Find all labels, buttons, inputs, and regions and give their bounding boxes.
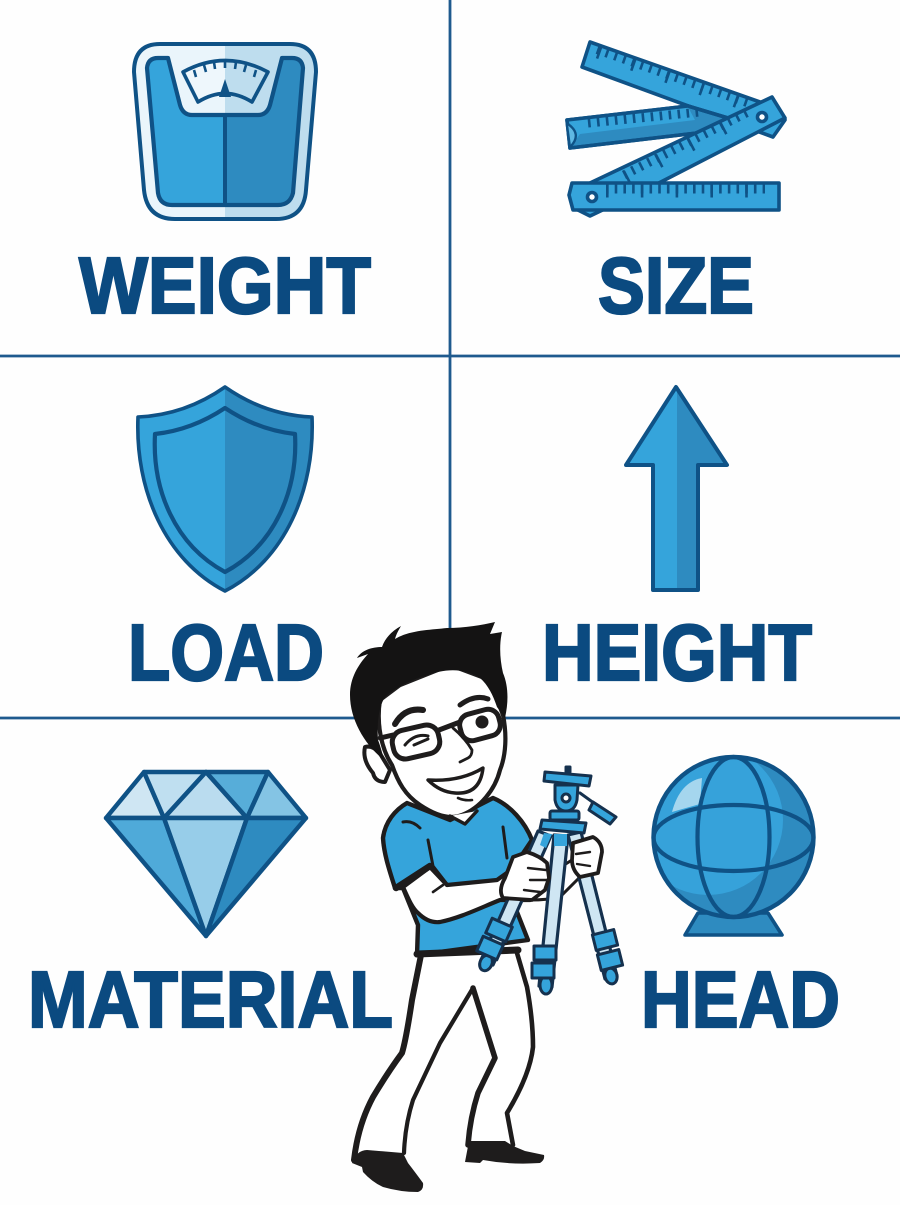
- man: left arm: [403, 860, 530, 922]
- man: shoes: [352, 1141, 544, 1192]
- icon: folding ruler: [567, 42, 785, 216]
- man: hand on left leg: [501, 852, 549, 900]
- character: man holding tripod: [350, 622, 623, 1192]
- label: load: LOAD: [128, 608, 324, 697]
- tripod: leg cuffs: [477, 918, 623, 994]
- man: elbow crease: [433, 885, 443, 892]
- icon: ball head globe: [651, 754, 816, 937]
- label: head: HEAD: [641, 955, 840, 1044]
- label: weight: WEIGHT: [79, 241, 371, 330]
- man: trousers: [352, 950, 533, 1163]
- man: sleeve hem: [396, 866, 430, 888]
- tripod: head and plate: [540, 767, 616, 848]
- man: face: [379, 665, 505, 824]
- tripod: legs: [481, 831, 617, 987]
- man: ear: [364, 747, 390, 782]
- label: material: MATERIAL: [28, 955, 393, 1044]
- tripod: [477, 767, 623, 994]
- man: t-shirt: [383, 798, 532, 955]
- man: hand on right leg: [572, 837, 602, 877]
- man: glasses: [380, 707, 503, 761]
- label: size: SIZE: [598, 241, 754, 330]
- icon: shield: [138, 387, 312, 591]
- icon: weighing scale: [134, 44, 316, 219]
- label: height: HEIGHT: [542, 608, 812, 697]
- man: right forearm: [530, 860, 582, 900]
- icon: diamond: [106, 772, 306, 936]
- man: hair: [350, 622, 507, 760]
- icon: up arrow: [626, 387, 727, 590]
